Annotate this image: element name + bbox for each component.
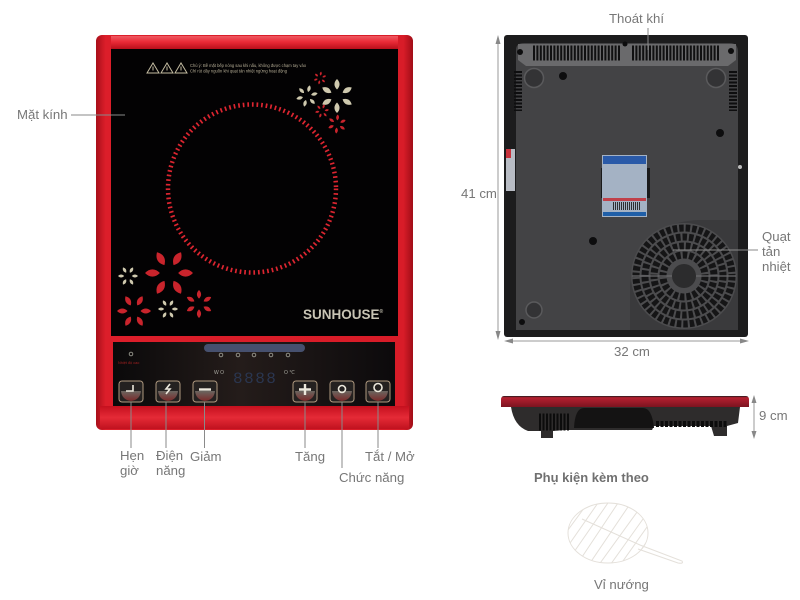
side view (501, 396, 749, 438)
buttons (119, 381, 390, 402)
label: exhaust: Thoát khí (609, 11, 664, 26)
side screw (738, 165, 742, 169)
fan grille (631, 223, 737, 329)
glass surface (111, 49, 398, 336)
label recess (601, 168, 650, 198)
cooking zone ring (168, 104, 336, 272)
label: glass surface (17, 107, 125, 122)
label: fan: Quạt (762, 229, 791, 244)
spec label stripe (603, 198, 646, 201)
label: timer: giờ (120, 463, 139, 478)
inner housing (516, 43, 738, 330)
red body (96, 35, 413, 430)
rubber feet (524, 68, 737, 328)
red top plate (501, 396, 749, 407)
induction cooker top view: O ℃ (284, 370, 295, 376)
label: on off: Tắt / Mở (365, 449, 415, 464)
label: fan (673, 229, 791, 274)
top vent band (518, 44, 736, 66)
warning text: Chỉ rút dây nguồn khi quạt tản nhiệt ngừng hoạt động (190, 68, 288, 74)
dimension: width 32 cm (504, 338, 749, 359)
spec label footer (603, 212, 646, 216)
label: fan: nhiệt (762, 259, 791, 274)
sticker red tip (506, 149, 511, 158)
induction cooker top view (96, 35, 413, 430)
right vent (656, 421, 727, 427)
spec label header (603, 156, 646, 164)
label: function: Chức năng (339, 470, 404, 485)
label: increase: Tăng (295, 449, 325, 464)
screw holes (517, 42, 734, 325)
label: power (156, 402, 185, 478)
label: glass surface: Mặt kính (17, 107, 68, 122)
fan housing (630, 220, 738, 330)
digital display: 8888 (233, 370, 277, 388)
label: increase (295, 402, 325, 464)
label: function (339, 402, 404, 485)
dimension: height 41 cm: 41 cm (461, 186, 497, 201)
side handle recess (574, 408, 654, 428)
indicator dots (129, 352, 290, 357)
dimension: depth 9 cm: 9 cm (759, 408, 788, 423)
accessories heading: Phụ kiện kèm theo (534, 470, 649, 485)
high temperature caption: Nhiệt độ cao (118, 361, 139, 365)
label: power: năng (156, 463, 185, 478)
underside view (504, 35, 748, 337)
side vent (539, 414, 570, 430)
label: exhaust (609, 11, 664, 50)
warning text: Chú ý: Bề mặt bếp nóng sau khi nấu, không được chạm tay vào (190, 63, 307, 68)
button bowls (121, 391, 388, 401)
spec label (602, 155, 647, 217)
accessory label: Vỉ nướng (594, 577, 649, 592)
spec label barcode (613, 202, 640, 210)
unit labels: W O (214, 370, 224, 376)
label: timer (120, 402, 144, 478)
label: timer: Hẹn (120, 448, 144, 463)
top vents (533, 46, 719, 60)
brand logo: ® (380, 308, 384, 315)
label: power: Điện (156, 448, 183, 463)
base plate (504, 35, 748, 337)
mode strip (204, 344, 305, 352)
brand logo: SUNHOUSE (303, 307, 380, 322)
side vents (518, 71, 733, 111)
control panel (113, 342, 395, 406)
warning icons (147, 63, 187, 73)
flower decorations (112, 71, 353, 334)
label: decrease: Giảm (190, 449, 222, 464)
button glyphs (126, 384, 382, 395)
bottom rim (100, 406, 409, 429)
top rim highlight (111, 36, 398, 49)
dimension: depth 9 cm (752, 395, 788, 439)
label: fan: tản (762, 244, 780, 259)
side sticker (506, 149, 515, 191)
warning text (190, 63, 307, 74)
side body (511, 407, 740, 438)
label: on off (365, 402, 415, 464)
icon: grill rack (568, 500, 682, 568)
dimension: width 32 cm: 32 cm (614, 344, 650, 359)
dimension: height 41 cm (461, 35, 500, 340)
label: decrease (190, 402, 222, 464)
